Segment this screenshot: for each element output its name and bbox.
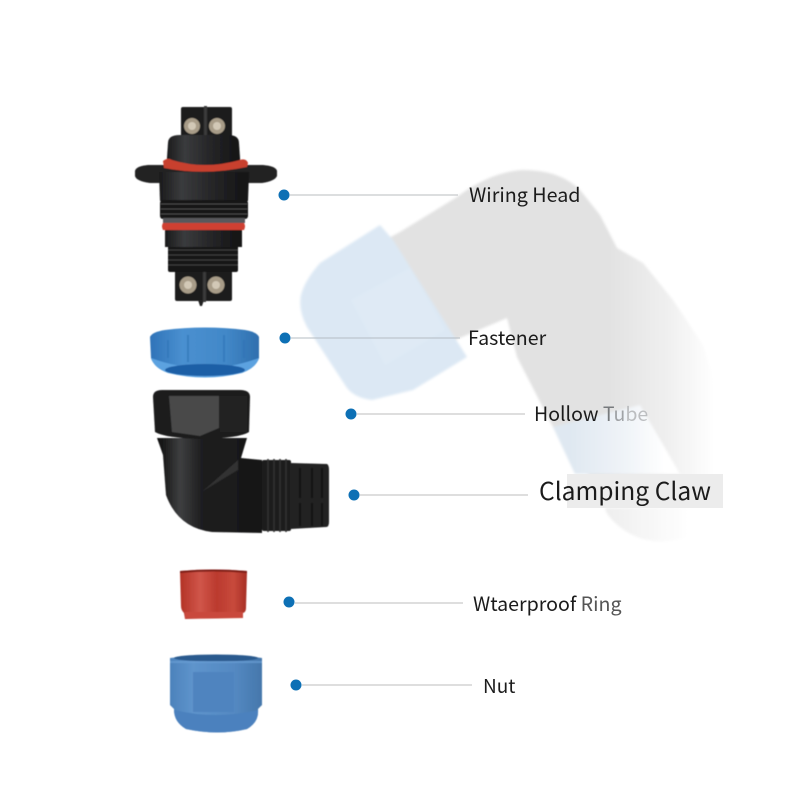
callout: waterproof ring: Wtaerproof Ring (473, 588, 622, 617)
callout: hollow tube: Hollow Tube (534, 398, 648, 427)
callout: wiring head: Wiring Head (469, 179, 580, 208)
ghost elbow connector backdrop (300, 170, 722, 541)
part: waterproof ring (180, 570, 247, 619)
part: hollow tube elbow (153, 390, 329, 533)
red ring lower (162, 223, 245, 230)
thread (262, 460, 291, 531)
lower thread and terminal (165, 228, 242, 306)
elbow pipe (157, 438, 262, 533)
flange (135, 165, 277, 183)
callout: fastener (280, 322, 547, 351)
callout: wiring head (278, 179, 580, 208)
red ring upper (163, 159, 248, 172)
callout: clamping claw (348, 472, 723, 508)
callout: clamping claw: Clamping Claw (539, 472, 711, 508)
callout: hollow tube (346, 398, 648, 427)
callout: fastener: Fastener (468, 322, 547, 351)
top terminal block (181, 106, 232, 139)
callout: waterproof ring (284, 588, 622, 617)
callout: nut (290, 672, 515, 699)
callout: nut: Nut (483, 672, 515, 699)
upper body (159, 172, 249, 201)
part: fastener (150, 328, 259, 378)
upper thread (160, 200, 248, 223)
collar (166, 135, 241, 172)
clamping claw (290, 463, 329, 529)
hex nut (153, 390, 250, 439)
part: wiring head (135, 106, 277, 306)
part: nut (170, 654, 262, 732)
